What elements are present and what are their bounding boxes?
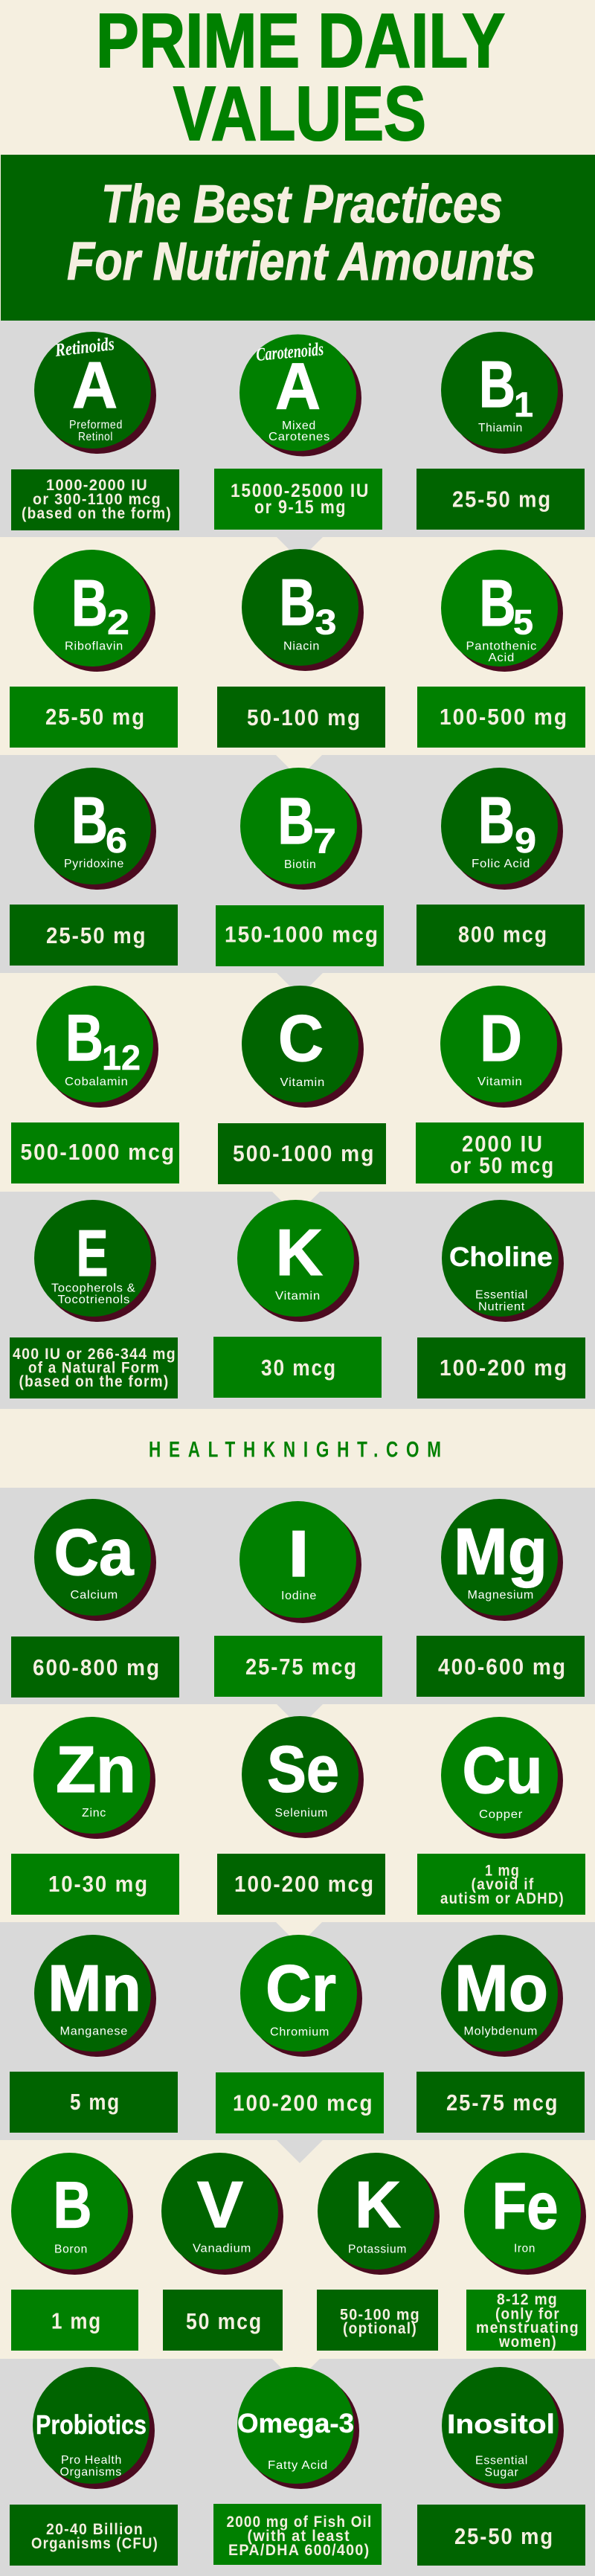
nutrient: E tocopherols: Tocopherols & bbox=[51, 1282, 135, 1294]
panel: vitamins A and B1 bbox=[0, 321, 595, 537]
nutrient: omega-3 bbox=[213, 2367, 382, 2565]
nutrient: B6 pyridoxine: B bbox=[71, 783, 108, 857]
panel: B6 B7 B9 bbox=[0, 755, 595, 973]
nutrient: iron: women) bbox=[498, 2334, 557, 2351]
nutrient: B1 thiamin: B bbox=[479, 347, 515, 421]
nutrient: copper: Cu bbox=[463, 1733, 543, 1807]
nutrient: omega-3: Fatty Acid bbox=[268, 2459, 328, 2472]
panel: B2 B3 B5 bbox=[0, 537, 595, 755]
nutrient: choline: 100-200 mg bbox=[440, 1355, 568, 1381]
nutrient: calcium: Ca bbox=[54, 1515, 134, 1589]
nutrient: iron: Iron bbox=[514, 2242, 536, 2255]
nutrient: probiotics: Probiotics bbox=[36, 2409, 147, 2440]
nutrient: B3 niacin: 3 bbox=[315, 603, 336, 641]
nutrient: B5 pantothenic acid bbox=[417, 550, 585, 748]
nutrient: E tocopherols: 400 IU or 266-344 mg bbox=[13, 1346, 176, 1363]
nutrient: K vitamin: 30 mcg bbox=[261, 1355, 337, 1381]
nutrient: manganese bbox=[10, 1935, 178, 2133]
nutrient: B6 pyridoxine: 6 bbox=[106, 820, 127, 860]
nutrient: choline: Choline bbox=[449, 1242, 553, 1272]
nutrient: potassium: 50-100 mg bbox=[340, 2306, 420, 2324]
nutrient: selenium: Selenium bbox=[275, 1807, 328, 1819]
nutrient: potassium: (optional) bbox=[343, 2320, 417, 2337]
nutrient: B1 thiamin: 1 bbox=[514, 385, 533, 424]
nutrient: B7 biotin: B bbox=[278, 784, 314, 858]
nutrient: A retinoids: A bbox=[72, 348, 118, 422]
nutrient: copper bbox=[417, 1717, 585, 1915]
nutrient: copper: (avoid if bbox=[472, 1876, 534, 1893]
panel: B V K Fe bbox=[0, 2140, 595, 2359]
nutrient: iron: (only for bbox=[495, 2306, 560, 2322]
nutrient: B12 cobalamin: Cobalamin bbox=[65, 1076, 128, 1088]
nutrient: iron bbox=[464, 2153, 586, 2351]
nutrient: copper: autism or ADHD) bbox=[440, 1890, 565, 1907]
nutrient: A retinoids: Preformed bbox=[69, 419, 123, 431]
panel: probiotics omega-3 inositol bbox=[0, 2359, 595, 2576]
nutrient: choline bbox=[417, 1200, 585, 1398]
nutrient: chromium bbox=[216, 1935, 384, 2133]
nutrient: inositol: Inositol bbox=[447, 2409, 555, 2439]
nutrient: zinc: 10-30 mg bbox=[48, 1871, 149, 1897]
nutrient: vanadium bbox=[161, 2153, 283, 2351]
panel: Mn Cr Mo bbox=[0, 1922, 595, 2140]
nutrient: B7 biotin: Biotin bbox=[284, 858, 317, 871]
footer brand: healthknight.com: HEALTHKNIGHT.COM bbox=[149, 1436, 441, 1462]
nutrient: iron: Fe bbox=[492, 2169, 558, 2243]
nutrient: B1 thiamin: Thiamin bbox=[478, 422, 523, 434]
nutrient: C vitamin: 500-1000 mg bbox=[233, 1140, 375, 1166]
title: VALUES bbox=[173, 71, 426, 156]
nutrient: D vitamin: or 50 mcg bbox=[450, 1152, 555, 1178]
nutrient: B6 pyridoxine bbox=[10, 768, 178, 966]
nutrient: molybdenum: Molybdenum bbox=[464, 2025, 538, 2038]
nutrient: molybdenum: Mo bbox=[454, 1951, 548, 2025]
nutrient: B5 pantothenic acid: 100-500 mg bbox=[440, 704, 568, 730]
nutrient: zinc: Zn bbox=[56, 1732, 136, 1806]
nutrient: E tocopherols: of a Natural Form bbox=[28, 1360, 160, 1376]
nutrient: A retinoids: Retinoids bbox=[54, 334, 115, 361]
nutrient: A retinoids: or 300-1100 mcg bbox=[33, 491, 161, 508]
nutrient: molybdenum bbox=[416, 1935, 585, 2133]
nutrient: B12 cobalamin: B bbox=[65, 1001, 103, 1074]
nutrient: inositol: Sugar bbox=[485, 2467, 519, 2479]
nutrient: zinc: Zinc bbox=[82, 1807, 106, 1819]
nutrient: chromium: Cr bbox=[266, 1951, 336, 2025]
nutrient: A carotenoids: 15000-25000 IU bbox=[231, 481, 370, 501]
nutrient: B9 folic acid: 800 mcg bbox=[458, 921, 548, 948]
nutrient: A carotenoids: Mixed bbox=[282, 420, 316, 432]
nutrient: probiotics: 20-40 Billion bbox=[46, 2521, 144, 2538]
nutrient: B1 thiamin bbox=[416, 332, 585, 530]
nutrient: probiotics: Organisms (CFU) bbox=[31, 2535, 158, 2552]
nutrient: D vitamin: 2000 IU bbox=[462, 1131, 544, 1157]
nutrient: B5 pantothenic acid: Pantothenic bbox=[466, 640, 537, 653]
nutrient: molybdenum: 25-75 mcg bbox=[446, 2090, 559, 2116]
nutrient: B3 niacin: B bbox=[280, 565, 315, 639]
nutrient: B3 niacin: 50-100 mg bbox=[247, 704, 361, 730]
nutrient: B2 riboflavin: B bbox=[71, 566, 108, 640]
nutrient: B7 biotin: 150-1000 mcg bbox=[225, 921, 379, 948]
nutrient: choline: Essential bbox=[475, 1288, 528, 1302]
nutrient: B2 riboflavin bbox=[10, 550, 178, 748]
nutrient: manganese: Mn bbox=[48, 1951, 141, 2025]
nutrient: vanadium: 50 mcg bbox=[186, 2308, 263, 2334]
nutrient: B5 pantothenic acid: Acid bbox=[488, 652, 515, 664]
panel: B12 C D bbox=[0, 973, 595, 1192]
nutrient: K vitamin bbox=[213, 1200, 382, 1398]
nutrient: omega-3: (with at least bbox=[247, 2528, 350, 2545]
nutrient: K vitamin: K bbox=[275, 1215, 323, 1289]
nutrient: probiotics: Pro Health bbox=[61, 2454, 122, 2467]
nutrient: selenium bbox=[217, 1716, 385, 1915]
nutrient: copper: Copper bbox=[479, 1808, 523, 1821]
subtitle banner bbox=[1, 155, 595, 321]
nutrient: C vitamin: Vitamin bbox=[280, 1076, 325, 1089]
nutrient: copper: 1 mg bbox=[485, 1863, 520, 1879]
nutrient: magnesium bbox=[416, 1499, 585, 1697]
nutrient: D vitamin bbox=[416, 986, 584, 1183]
nutrient: boron bbox=[11, 2153, 138, 2351]
nutrient: B7 biotin: 7 bbox=[313, 821, 336, 861]
nutrient: iodine bbox=[214, 1501, 382, 1697]
nutrient: B9 folic acid: B bbox=[478, 783, 515, 857]
nutrient: A carotenoids bbox=[214, 335, 382, 530]
nutrient: B3 niacin: Niacin bbox=[283, 640, 320, 653]
nutrient: K vitamin: Vitamin bbox=[275, 1290, 321, 1303]
nutrient: E tocopherols: (based on the form) bbox=[19, 1373, 170, 1390]
nutrient: B6 pyridoxine: 25-50 mg bbox=[46, 922, 147, 948]
nutrient: A carotenoids: Carotenes bbox=[268, 431, 330, 443]
nutrient: B2 riboflavin: 2 bbox=[107, 603, 129, 641]
nutrient: omega-3: Omega-3 bbox=[237, 2408, 354, 2438]
nutrient: A carotenoids: or 9-15 mg bbox=[254, 497, 347, 518]
nutrient: choline: Nutrient bbox=[478, 1300, 525, 1314]
title bbox=[96, 0, 505, 156]
nutrient: D vitamin: D bbox=[480, 1001, 522, 1075]
nutrient: B9 folic acid: Folic Acid bbox=[472, 858, 530, 870]
nutrient: B12 cobalamin bbox=[11, 986, 179, 1183]
nutrient: selenium: 100-200 mcg bbox=[234, 1871, 375, 1897]
nutrient: E tocopherols: Tocotrienols bbox=[58, 1294, 130, 1306]
nutrient: probiotics: Organisms bbox=[60, 2466, 122, 2479]
nutrient: iodine: Iodine bbox=[281, 1590, 317, 1602]
nutrient: E tocopherols: E bbox=[76, 1216, 109, 1290]
nutrient: C vitamin: C bbox=[278, 1001, 324, 1075]
nutrient: inositol: Essential bbox=[475, 2455, 528, 2467]
panel: Zn Se Cu bbox=[0, 1704, 595, 1922]
nutrient: magnesium: 400-600 mg bbox=[438, 1654, 567, 1680]
nutrient: iodine: 25-75 mcg bbox=[245, 1654, 358, 1680]
nutrient: A retinoids bbox=[11, 332, 179, 530]
nutrient: C vitamin bbox=[218, 986, 386, 1184]
nutrient: A carotenoids: Carotenoids bbox=[255, 339, 324, 365]
nutrient: manganese: 5 mg bbox=[70, 2089, 120, 2115]
panel: Ca I Mg bbox=[0, 1488, 595, 1704]
nutrient: calcium bbox=[11, 1499, 179, 1697]
nutrient: potassium bbox=[317, 2153, 440, 2351]
nutrient: manganese: Manganese bbox=[60, 2025, 128, 2038]
nutrient: magnesium: Mg bbox=[454, 1515, 547, 1588]
nutrient: boron: 1 mg bbox=[51, 2307, 102, 2334]
title: PRIME DAILY bbox=[96, 0, 505, 83]
nutrient: A retinoids: (based on the form) bbox=[22, 505, 172, 522]
nutrient: B2 riboflavin: 25-50 mg bbox=[45, 704, 146, 730]
nutrient: B1 thiamin: 25-50 mg bbox=[452, 486, 552, 512]
nutrient: B3 niacin bbox=[217, 549, 385, 748]
nutrient: B6 pyridoxine: Pyridoxine bbox=[64, 858, 124, 870]
nutrient: D vitamin: Vitamin bbox=[477, 1076, 522, 1088]
nutrient: vanadium: Vanadium bbox=[193, 2242, 251, 2255]
nutrient: potassium: K bbox=[355, 2168, 401, 2241]
nutrient: chromium: Chromium bbox=[270, 2026, 329, 2038]
nutrient: calcium: 600-800 mg bbox=[33, 1654, 161, 1680]
nutrient: vanadium: V bbox=[197, 2168, 243, 2241]
nutrient: magnesium: Magnesium bbox=[467, 1589, 534, 1602]
nutrient: chromium: 100-200 mcg bbox=[233, 2090, 373, 2116]
nutrient: calcium: Calcium bbox=[70, 1589, 118, 1602]
nutrient: selenium: Se bbox=[267, 1732, 339, 1806]
subtitle banner: The Best Practices bbox=[101, 175, 503, 234]
nutrient: iron: menstruating bbox=[476, 2319, 579, 2336]
nutrient: inositol: 25-50 mg bbox=[454, 2523, 554, 2549]
nutrient: B7 biotin bbox=[216, 768, 384, 966]
nutrient: E tocopherols bbox=[10, 1200, 178, 1398]
nutrient: iron: 8-12 mg bbox=[497, 2291, 558, 2308]
nutrient: A retinoids: 1000-2000 IU bbox=[46, 477, 148, 494]
nutrient: B5 pantothenic acid: 5 bbox=[513, 603, 533, 641]
nutrient: potassium: Potassium bbox=[348, 2243, 407, 2255]
nutrient: A retinoids: Retinol bbox=[78, 431, 113, 443]
nutrient: omega-3: 2000 mg of Fish Oil bbox=[226, 2514, 372, 2531]
nutrient: omega-3: EPA/DHA 600/400) bbox=[228, 2542, 370, 2559]
panel: E K choline bbox=[0, 1192, 595, 1409]
nutrient: B9 folic acid bbox=[416, 768, 585, 966]
nutrient: zinc bbox=[11, 1717, 179, 1915]
nutrient: boron: B bbox=[54, 2168, 92, 2242]
nutrient: inositol bbox=[417, 2367, 585, 2566]
nutrient: B5 pantothenic acid: B bbox=[479, 566, 516, 640]
nutrient: B12 cobalamin: 500-1000 mcg bbox=[21, 1139, 176, 1165]
nutrient: B9 folic acid: 9 bbox=[515, 820, 536, 860]
nutrient: boron: Boron bbox=[54, 2243, 88, 2255]
nutrient: B2 riboflavin: Riboflavin bbox=[65, 640, 123, 653]
nutrient: iodine: I bbox=[288, 1517, 309, 1590]
nutrient: probiotics bbox=[10, 2367, 178, 2566]
nutrient: A carotenoids: A bbox=[275, 350, 321, 423]
nutrient: B12 cobalamin: 12 bbox=[102, 1038, 141, 1077]
